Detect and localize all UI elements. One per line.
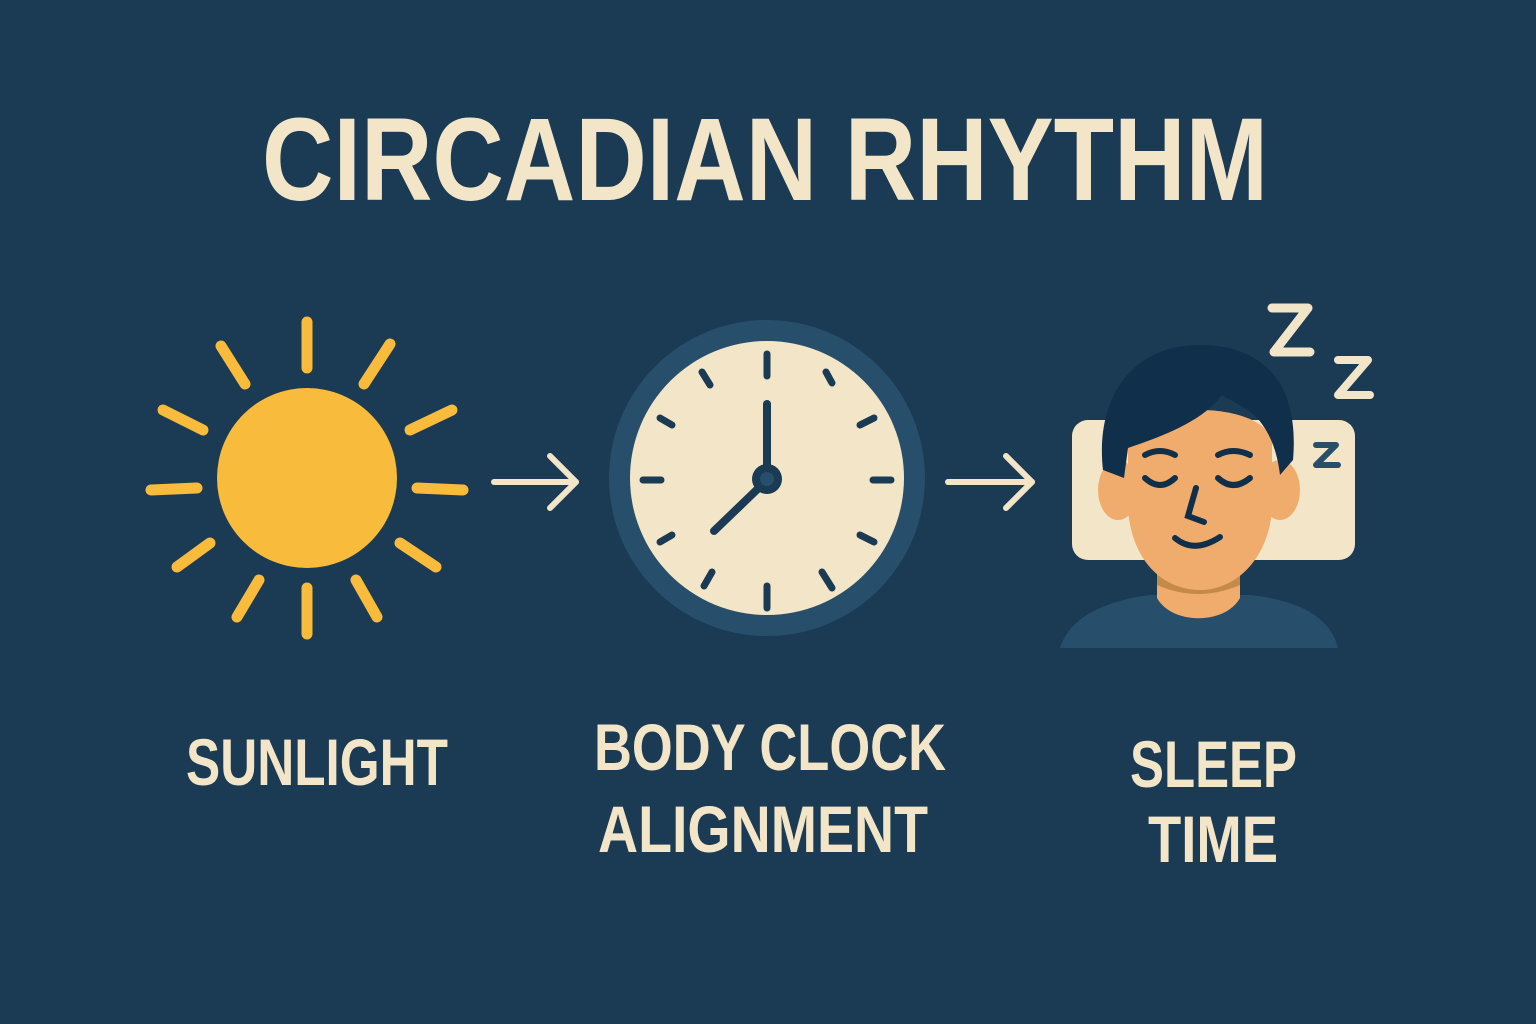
shirt — [1060, 595, 1338, 648]
label: sleep time — [1130, 727, 1297, 876]
neck — [1157, 560, 1240, 618]
label: sunlight: SUNLIGHT — [186, 725, 448, 799]
icon: clock — [609, 320, 925, 636]
label: body clock alignment: ALIGNMENT — [598, 792, 928, 866]
pillow — [1072, 420, 1355, 560]
face — [1128, 410, 1272, 590]
arrow: sun to clock — [494, 456, 576, 508]
label: body clock alignment: BODY CLOCK — [594, 710, 946, 784]
ears — [1098, 460, 1138, 520]
title: CIRCADIAN RHYTHM — [262, 94, 1268, 226]
arrow: clock to sleep — [948, 456, 1032, 508]
icon: sleeping person — [1060, 308, 1370, 648]
label: sleep time: SLEEP — [1130, 727, 1297, 801]
label: sleep time: TIME — [1148, 802, 1278, 876]
zzz — [1272, 308, 1370, 465]
label: body clock alignment — [594, 710, 946, 866]
hair — [1102, 345, 1294, 478]
icon: sun — [151, 322, 463, 634]
